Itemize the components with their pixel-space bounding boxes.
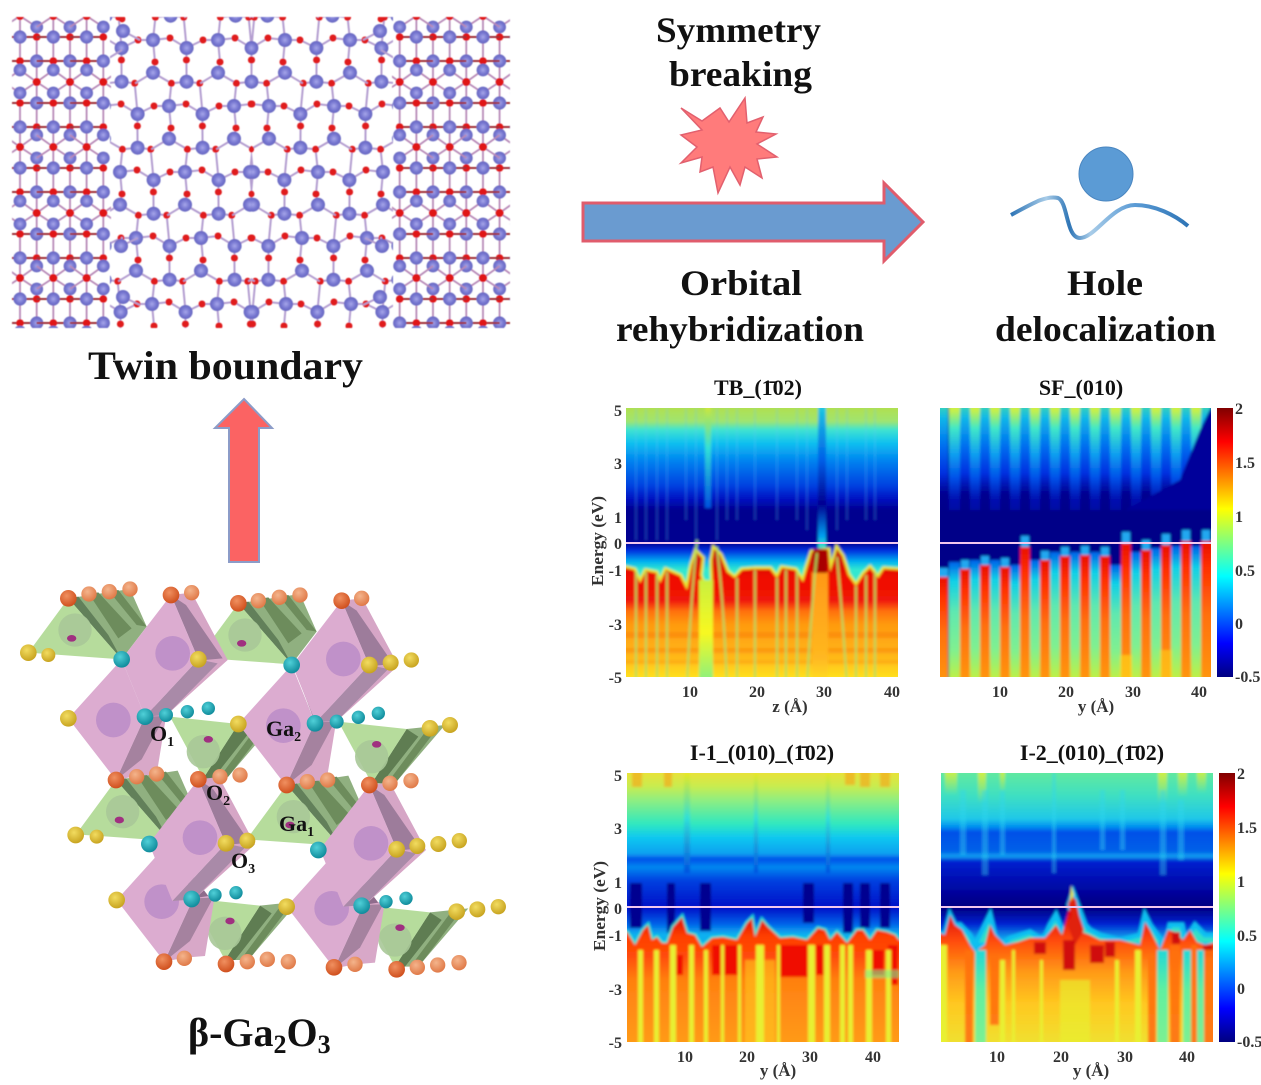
chart: I-1 heatmap: I-1_(010)_(1̄02) (690, 740, 834, 765)
heading: twin boundary: Twin boundary (88, 343, 363, 388)
chart: TB heatmap: -1 (609, 563, 622, 580)
chart: TB heatmap: 40 (884, 684, 900, 701)
chart: I-1 heatmap: 20 (739, 1049, 755, 1066)
chart: SF heatmap with colorbar: 20 (1058, 684, 1074, 701)
chart: I-1 heatmap: 30 (802, 1049, 818, 1066)
chart: SF heatmap with colorbar: 30 (1125, 684, 1141, 701)
chart: TB heatmap: 5 (614, 403, 622, 420)
heading: beta gallium oxide: β-Ga (188, 1010, 274, 1055)
colorbar (1217, 408, 1233, 677)
chart: SF heatmap with colorbar: SF_(010) (1039, 375, 1123, 400)
arrow: upward red arrow (215, 399, 272, 562)
icon: hole on wave (1011, 147, 1188, 238)
heading: symmetry breaking: Symmetry (656, 10, 821, 50)
atom labels: Ga (266, 716, 294, 741)
colorbar (1219, 773, 1235, 1042)
chart: I-2 heatmap with colorbar: 0 (1237, 981, 1245, 998)
heading: symmetry breaking (656, 10, 821, 94)
chart: TB heatmap: 10 (682, 684, 698, 701)
heading: hole delocalization: Hole (1067, 263, 1143, 303)
chart: I-1 heatmap (590, 740, 910, 1080)
chart: I-2 heatmap with colorbar: y (Å) (1073, 1061, 1109, 1080)
chart: I-2 heatmap with colorbar: 10 (989, 1049, 1005, 1066)
icon: red starburst (681, 98, 777, 193)
atom labels (150, 716, 314, 877)
chart: I-2 heatmap with colorbar: 0.5 (1237, 928, 1257, 945)
panel: beta gallium oxide crystal structure (20, 581, 506, 978)
chart: SF heatmap with colorbar: 0.5 (1235, 563, 1255, 580)
chart: SF heatmap with colorbar: y (Å) (1078, 697, 1114, 716)
chart: TB heatmap: Energy (eV) (588, 496, 607, 586)
chart: SF heatmap with colorbar: 0 (1235, 616, 1243, 633)
chart: I-2 heatmap with colorbar: 1.5 (1237, 820, 1257, 837)
chart: I-2 heatmap with colorbar: 2 (1237, 766, 1245, 783)
chart: SF heatmap with colorbar: 1.5 (1235, 455, 1255, 472)
heading: hole delocalization: delocalization (995, 309, 1216, 349)
chart: TB heatmap: 30 (816, 684, 832, 701)
chart: TB heatmap: 0 (614, 536, 622, 553)
heading: symmetry breaking: breaking (669, 54, 812, 94)
atom labels: O (206, 780, 223, 805)
chart: TB heatmap: -3 (609, 617, 622, 634)
chart: TB heatmap: TB_(1̄02) (714, 375, 802, 400)
chart: I-2 heatmap with colorbar: 30 (1117, 1049, 1133, 1066)
chart: I-2 heatmap with colorbar: 1 (1237, 874, 1245, 891)
chart: I-1 heatmap: -5 (609, 1035, 622, 1052)
atom labels: O (150, 721, 167, 746)
chart: I-2 heatmap with colorbar: I-2_(010)_(1̄02) (1020, 740, 1164, 765)
arrow: blue process arrow (583, 183, 923, 261)
chart: TB heatmap: 20 (749, 684, 765, 701)
atom labels: 3 (248, 862, 255, 877)
chart: I-1 heatmap: 5 (614, 768, 622, 785)
heading: beta gallium oxide: 2 (274, 1030, 287, 1059)
chart: I-1 heatmap: 3 (614, 821, 622, 838)
atom labels: 1 (167, 735, 174, 750)
chart: I-1 heatmap: 40 (865, 1049, 881, 1066)
chart: I-2 heatmap with colorbar (930, 740, 1261, 1080)
heading: orbital rehybridization (616, 263, 864, 349)
chart: SF heatmap with colorbar (930, 375, 1260, 716)
heading: beta gallium oxide: 3 (318, 1030, 331, 1059)
chart: TB heatmap: z (Å) (772, 697, 808, 716)
chart: SF heatmap with colorbar: 1 (1235, 509, 1243, 526)
chart: TB heatmap: -5 (609, 670, 622, 687)
chart: SF heatmap with colorbar: -0.5 (1235, 669, 1260, 686)
panel: twin boundary atomic lattice (11, 16, 511, 329)
chart: I-2 heatmap with colorbar: 40 (1179, 1049, 1195, 1066)
atom labels: O (231, 848, 248, 873)
heading: orbital rehybridization: Orbital (680, 263, 802, 303)
chart: I-1 heatmap: 1 (614, 875, 622, 892)
atom labels: 2 (294, 730, 301, 745)
chart: TB heatmap (588, 375, 910, 716)
atom labels: 2 (223, 794, 230, 809)
chart: I-1 heatmap: -1 (609, 928, 622, 945)
atom labels: 1 (307, 825, 314, 840)
chart: I-1 heatmap: -3 (609, 982, 622, 999)
heading: hole delocalization (995, 263, 1216, 349)
chart: I-1 heatmap: 0 (614, 901, 622, 918)
chart: I-2 heatmap with colorbar: 20 (1053, 1049, 1069, 1066)
chart: SF heatmap with colorbar: 2 (1235, 401, 1243, 418)
chart: SF heatmap with colorbar: 40 (1191, 684, 1207, 701)
chart: I-1 heatmap: 10 (677, 1049, 693, 1066)
atom labels: Ga (279, 811, 307, 836)
chart: I-1 heatmap: Energy (eV) (590, 861, 609, 951)
heading: orbital rehybridization: rehybridization (616, 309, 864, 349)
chart: I-1 heatmap: y (Å) (760, 1061, 796, 1080)
chart: TB heatmap: 3 (614, 456, 622, 473)
chart: SF heatmap with colorbar: 10 (992, 684, 1008, 701)
heading: beta gallium oxide: O (287, 1010, 318, 1055)
chart: TB heatmap: 1 (614, 510, 622, 527)
